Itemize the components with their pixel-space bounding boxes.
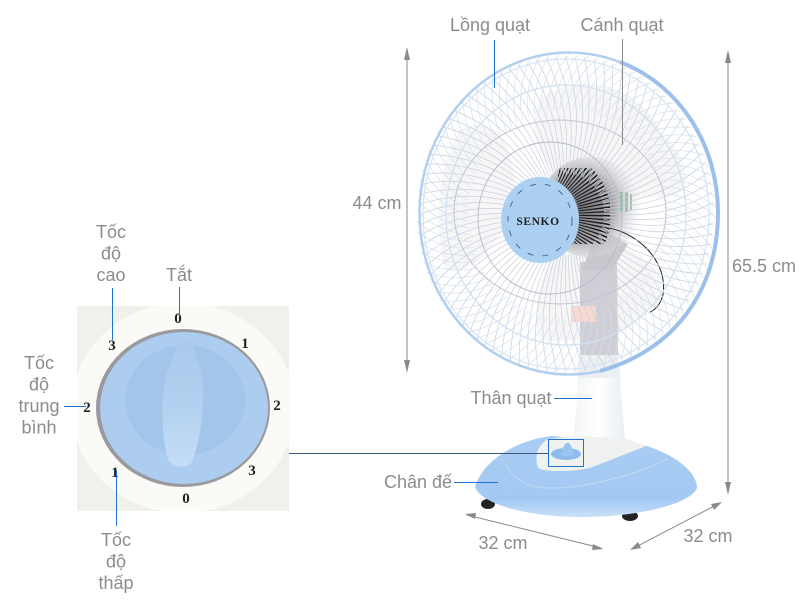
dial numbers: 2	[273, 398, 281, 414]
dark spokes	[558, 168, 610, 244]
label: depth 32 cm: 32 cm	[478, 533, 528, 553]
label: medium speed: bình	[21, 418, 57, 438]
outer rim	[420, 52, 718, 374]
dial numbers: 1	[241, 336, 249, 352]
label: low speed: độ	[106, 552, 126, 572]
knob handle	[162, 360, 203, 466]
hub	[501, 177, 579, 263]
label: medium speed: trung	[18, 396, 60, 416]
grill wires	[367, 1, 765, 427]
cable	[610, 228, 664, 312]
stand behind grill	[580, 262, 618, 355]
dial knob	[100, 332, 268, 484]
hub: SENKO	[516, 216, 560, 228]
label: width 32 cm: 32 cm	[683, 526, 733, 546]
label: high speed: độ	[101, 244, 121, 264]
label: height 65.5 cm: 65.5 cm	[732, 256, 796, 276]
label: low speed: Tốc	[101, 530, 131, 550]
motor	[540, 157, 640, 257]
fan neck	[573, 370, 625, 442]
label: fan base: Chân đế	[384, 472, 452, 492]
label: off: Tắt	[166, 264, 192, 285]
dial numbers: 1	[111, 465, 119, 481]
label: high speed: cao	[96, 265, 126, 285]
fan blades	[439, 84, 686, 341]
dial numbers: 0	[182, 491, 190, 507]
label: low speed: thấp	[98, 573, 134, 593]
label: medium speed: Tốc	[24, 353, 54, 373]
label: medium speed: độ	[29, 374, 49, 394]
sticker	[571, 306, 596, 322]
fan base	[475, 436, 697, 521]
label: fan body: Thân quạt	[470, 388, 552, 408]
dial numbers: 0	[174, 311, 182, 327]
label: fan blade: Cánh quạt	[580, 15, 664, 35]
control plate	[536, 436, 646, 471]
dial numbers: 3	[248, 463, 256, 479]
dial numbers	[83, 311, 281, 507]
callout lines	[64, 40, 592, 526]
dimension arrows	[404, 47, 731, 550]
dial ring	[96, 329, 270, 487]
dial numbers: 2	[83, 400, 91, 416]
label: high speed: Tốc	[96, 222, 126, 242]
fan head	[416, 51, 720, 378]
label: fan guard: Lồng quạt	[450, 15, 530, 35]
dial close-up	[71, 303, 295, 513]
connector: dial to fan	[289, 452, 548, 454]
dial numbers: 3	[108, 338, 116, 354]
label: height 44 cm: 44 cm	[352, 193, 402, 213]
